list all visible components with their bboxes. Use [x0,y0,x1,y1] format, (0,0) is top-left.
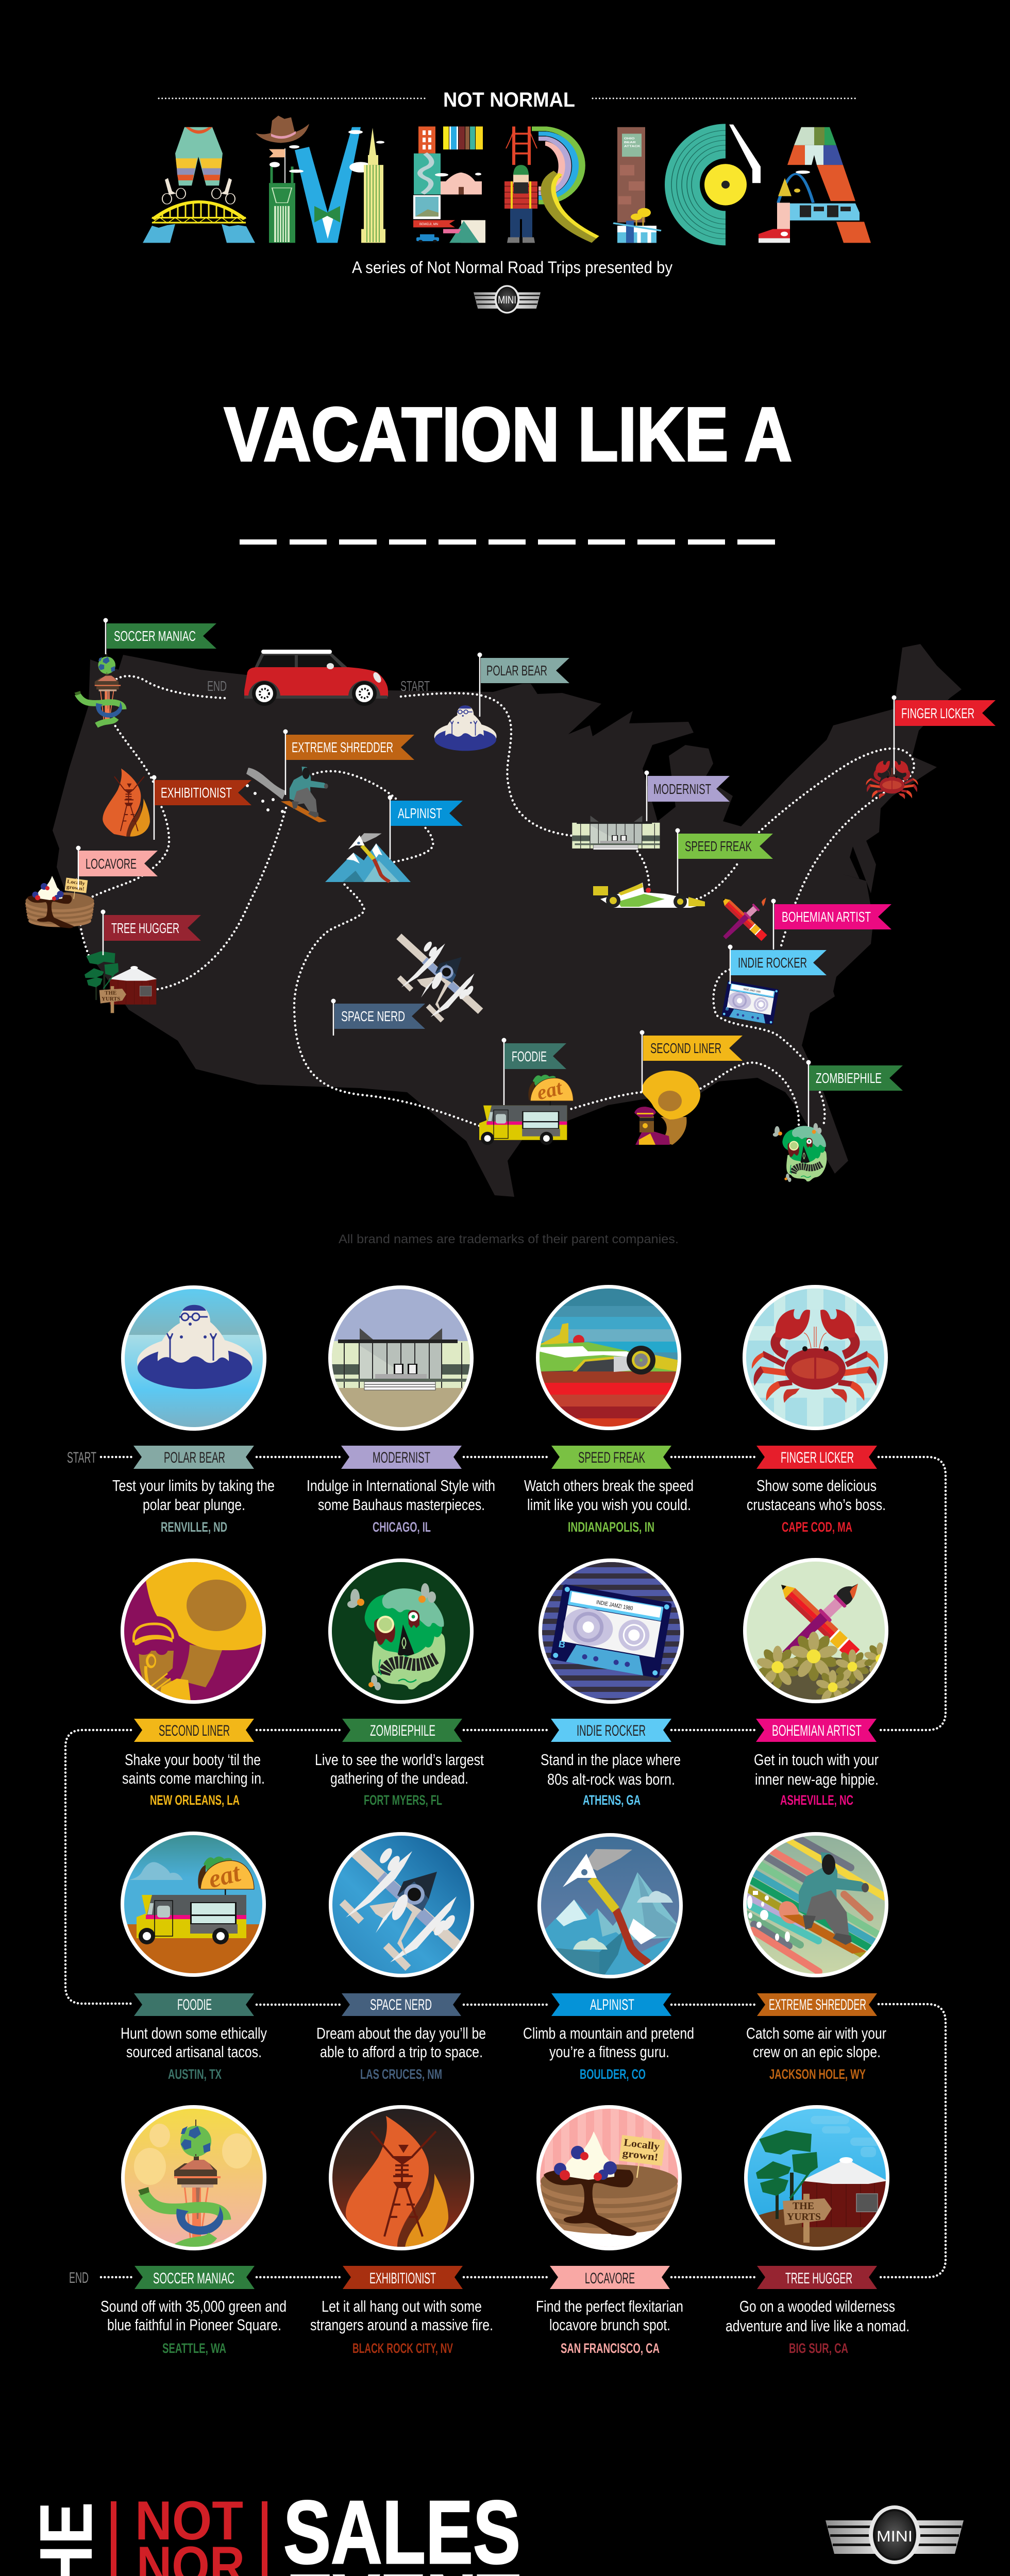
card: extreme shredder [743,1832,888,2082]
ribbon: speed freak: SPEED FREAK [578,1449,645,1466]
description: indie rocker [541,1751,681,1788]
description: indie rocker: 80s alt-rock was born. [547,1770,675,1788]
location: zombiephile: FORT MYERS, FL [364,1792,442,1808]
flag: space nerd: SPACE NERD [341,1008,405,1024]
flag: modernist: MODERNIST [653,781,711,797]
flag: soccer maniac: SOCCER MANIAC [114,628,196,644]
description: exhibitionist: strangers around a massive fire. [310,2316,493,2334]
flag: speed freak: SPEED FREAK [685,838,752,854]
letter E: buildings, books, road, alamo, postcard [413,126,485,243]
ribbon: finger licker [756,1446,877,1469]
icon: crab [866,760,918,799]
card: bohemian artist [743,1558,897,1808]
description: zombiephile: Live to see the world’s largest [315,1751,484,1769]
location: finger licker: CAPE COD, MA [782,1519,852,1535]
ribbon: zombiephile [342,1719,462,1742]
ribbon: soccer maniac: SOCCER MANIAC [153,2270,234,2287]
flag: zombiephile: ZOMBIEPHILE [816,1070,882,1086]
description: finger licker: Show some delicious [756,1477,877,1495]
card: space nerd [316,1832,486,2082]
flag: locavore [76,846,158,889]
medallion: speed freak [536,1285,681,1430]
description: speed freak: Watch others break the speed [524,1477,694,1495]
flag: soccer maniac [103,618,216,654]
medallion: spaceship [329,1832,474,1977]
flag: finger licker: FINGER LICKER [901,705,974,721]
icon: polar bear [434,705,497,751]
logo: mini large [826,2505,964,2564]
card: indie rocker [538,1558,684,1808]
heading: vacation like a: VACATION LIKE A [224,392,792,477]
logo: mini small [474,285,541,314]
icon: tuba player [634,1071,700,1145]
letter I: brick column, poster, house: ATTACK [624,145,641,148]
description: foodie: Hunt down some ethically [121,2024,267,2042]
description: finger licker [747,1477,886,1514]
flag: speed freak [675,828,773,893]
card: modernist [307,1285,495,1535]
flag: space nerd [331,998,425,1036]
letter C: vinyl record and tonearm [665,124,761,245]
card: polar bear [112,1285,275,1535]
description: modernist [307,1477,495,1514]
location: bohemian artist: ASHEVILLE, NC [780,1792,853,1808]
card: soccer maniac [100,2105,287,2356]
letter I: brick column, poster, house: BEAR [624,141,636,144]
red not normal stack [135,2489,246,2576]
medallion: zombie [328,1558,474,1704]
ribbon: second liner: SECOND LINER [159,1722,230,1739]
icon: modernist building [572,816,660,850]
ribbon: extreme shredder [757,1993,877,2016]
flag: extreme shredder: EXTREME SHREDDER [292,739,393,755]
flag: exhibitionist [152,775,251,840]
ribbon: modernist: MODERNIST [373,1449,430,1466]
flag: finger licker [891,696,996,774]
flag: indie rocker: INDIE ROCKER [738,955,807,971]
letter E: buildings, books, road, alamo, postcard: BEMIDJI, MN [419,222,438,226]
ribbon: foodie: FOODIE [177,1996,212,2013]
card: tree hugger [724,2105,920,2356]
description: bohemian artist: inner new-age hippie. [755,1770,879,1788]
ribbon: finger licker: FINGER LICKER [781,1449,854,1466]
description: modernist: some Bauhaus masterpieces. [318,1496,485,1514]
icon: spaceship plane [399,937,480,1021]
description: locavore: locavore brunch spot. [549,2316,670,2334]
ribbon: alpinist: ALPINIST [590,1996,634,2013]
ribbon: space nerd [342,1993,461,2016]
description: finger licker: crustaceans who’s boss. [747,1496,886,1514]
location: speed freak: INDIANAPOLIS, IN [568,1519,654,1535]
medallion: polar bear [121,1285,266,1431]
description: extreme shredder [746,2024,886,2061]
description: alpinist: Climb a mountain and pretend [523,2024,694,2042]
trademark note: All brand names are trademarks of their parent companies. [339,1232,679,1246]
ribbon: indie rocker: INDIE ROCKER [577,1722,646,1739]
flag: exhibitionist: EXHIBITIONIST [161,785,232,801]
ribbon: bohemian artist [756,1719,877,1742]
medallion: seattle soccer [121,2105,266,2250]
logo: mini large: MINI [877,2528,913,2545]
connector: dotted trail through the list [65,1457,946,2277]
list end label: END [69,2269,89,2286]
card: locavore [536,2105,683,2356]
description: extreme shredder: Catch some air with your [746,2024,886,2042]
icon: soccer seattle tower [75,653,124,725]
logo: mini small: MINI [498,294,516,306]
medallion: pancakes [536,2105,682,2250]
ribbon: space nerd: SPACE NERD [370,1996,432,2013]
flag: tree hugger: TREE HUGGER [111,920,179,936]
ribbon: extreme shredder: EXTREME SHREDDER [769,1996,866,2013]
icon: yurt and trees [85,951,157,1013]
ribbon: polar bear [133,1446,254,1469]
ribbon: exhibitionist [343,2266,463,2289]
subtitle: A series of Not Normal Road Trips presented by [352,258,672,277]
red not normal stack: NOT [135,2489,243,2551]
description: foodie: sourced artisanal tacos. [126,2043,262,2061]
medallion: modernist [328,1285,474,1434]
description: indie rocker: Stand in the place where [541,1751,681,1769]
location: indie rocker: ATHENS, GA [583,1792,641,1808]
end label: END [207,678,227,694]
medallion: tuba [121,1556,268,1704]
description: foodie [121,2024,267,2061]
description: locavore: Find the perfect flexitarian [536,2297,683,2315]
description: second liner: Shake your booty ‘til the [125,1751,261,1769]
description: polar bear [112,1477,275,1514]
description: alpinist: you’re a fitness guru. [549,2043,669,2061]
letter I: brick column, poster, house: OHIO [624,138,634,140]
ribbon: zombiephile: ZOMBIEPHILE [370,1722,435,1739]
description: alpinist [523,2024,694,2061]
icon: cassette [721,980,779,1025]
ribbon: second liner [134,1719,254,1742]
location: second liner: NEW ORLEANS, LA [150,1792,240,1808]
flag: alpinist [388,795,463,859]
icon: pencil and brush [719,894,769,941]
card: second liner [121,1556,268,1808]
red dividers [111,2501,267,2576]
flag: second liner: SECOND LINER [650,1040,721,1056]
location: soccer maniac: SEATTLE, WA [162,2341,226,2356]
description: tree hugger: adventure and live like a nomad. [726,2317,910,2335]
letter I: brick column, poster, house [613,127,661,243]
medallion: snowboarder [743,1832,888,1977]
description: space nerd [316,2024,486,2061]
footer: the not normal sales event [24,2482,520,2576]
header: not normal with dotted rules: NOT NORMAL [443,89,575,111]
letter A: sweater, cyclists, bridge [143,127,255,243]
description: bohemian artist: Get in touch with your [754,1751,879,1769]
letter R: bridge, rainbow, lumberjack, scarf [504,126,598,243]
icon: mountain and ice axe [325,833,411,882]
flag: bohemian artist [771,899,891,950]
medallion: pencil and brush [743,1558,897,1705]
letter M: tower, blue M, cowboy hat, bow tie, empire state [256,115,385,243]
location: extreme shredder: JACKSON HOLE, WY [769,2066,866,2082]
description: soccer maniac [100,2297,287,2334]
card: finger licker [743,1285,888,1535]
medallion: burning man [329,2105,474,2250]
location: tree hugger: BIG SUR, CA [789,2341,848,2356]
icon: snowboarder [246,767,328,822]
description: locavore [536,2297,683,2334]
location: polar bear: RENVILLE, ND [161,1519,227,1535]
description: zombiephile [315,1751,484,1787]
flag: foodie: FOODIE [512,1048,547,1064]
icon: burning man flame [103,769,150,837]
flag: extreme shredder [283,730,414,795]
ribbon: modernist [341,1446,462,1469]
card: exhibitionist [310,2105,493,2356]
flag: indie rocker [728,945,827,984]
ribbon: polar bear: POLAR BEAR [164,1449,225,1466]
ribbon: speed freak [551,1446,671,1469]
flag: bohemian artist: BOHEMIAN ARTIST [782,909,871,925]
ribbon: tree hugger: TREE HUGGER [785,2270,852,2287]
ribbon: bohemian artist: BOHEMIAN ARTIST [772,1722,862,1739]
ribbon: tree hugger [757,2266,877,2289]
icon: pancakes [25,876,94,928]
ribbon: indie rocker [551,1719,671,1742]
ribbon: alpinist [551,1993,671,2016]
description: exhibitionist: Let it all hang out with some [322,2297,482,2315]
description: second liner [122,1751,265,1787]
list start label: START [67,1449,96,1466]
description: polar bear: Test your limits by taking the [112,1477,275,1495]
icon: taco truck [479,1075,573,1145]
medallion: ice axe and mountains [533,1833,687,1983]
description: extreme shredder: crew on an epic slope. [753,2043,881,2061]
flag: alpinist: ALPINIST [398,805,442,821]
icon: red mini car [244,650,388,706]
flag: zombiephile [806,1060,903,1127]
ribbon: locavore [550,2266,670,2289]
start label: START [400,678,430,694]
description: speed freak [524,1477,694,1514]
description: tree hugger [726,2297,910,2335]
card: speed freak [524,1285,694,1535]
description: space nerd: Dream about the day you’ll be [316,2024,486,2042]
description: zombiephile: gathering of the undead. [330,1769,468,1787]
description: speed freak: limit like you wish you could. [527,1496,691,1514]
medallion: taco truck [121,1832,266,1981]
ribbon: soccer maniac [134,2266,255,2289]
description: second liner: saints come marching in. [122,1769,265,1787]
flag: tree hugger [101,910,201,955]
icon: zombie skull [773,1123,827,1182]
panel: us road trip map [25,618,996,1197]
location: space nerd: LAS CRUCES, NM [360,2066,442,2082]
description: soccer maniac: blue faithful in Pioneer Square. [107,2316,281,2334]
title art: america [143,115,871,245]
flag: polar bear [477,652,569,717]
flag: foodie [502,1038,566,1105]
blank word dashes [240,539,775,545]
medallion: crab [743,1285,888,1430]
card: zombiephile [315,1558,484,1808]
medallion: cassette [538,1558,684,1704]
icon: indy race car [593,883,705,908]
description: modernist: Indulge in International Style with [307,1477,495,1495]
ribbon: locavore: LOCAVORE [585,2270,635,2287]
location: foodie: AUSTIN, TX [168,2066,222,2082]
flag: modernist [644,771,730,821]
flag: polar bear: POLAR BEAR [486,663,547,679]
card: foodie [121,1832,267,2082]
location: locavore: SAN FRANCISCO, CA [561,2341,660,2356]
description: soccer maniac: Sound off with 35,000 green and [100,2297,287,2315]
route dots [80,676,914,1126]
letter A: patchwork, arch, train, sneaker [759,127,871,243]
medallion: yurt [724,2105,920,2283]
description: tree hugger: Go on a wooded wilderness [739,2297,895,2315]
description: polar bear: polar bear plunge. [143,1496,245,1514]
card: alpinist [523,1833,694,2082]
flag: locavore: LOCAVORE [86,856,137,872]
description: space nerd: able to afford a trip to space. [320,2043,483,2061]
ribbon: foodie [134,1993,254,2016]
location: alpinist: BOULDER, CO [580,2066,646,2082]
description: exhibitionist [310,2297,493,2334]
flag: second liner [640,1030,743,1092]
location: exhibitionist: BLACK ROCK CITY, NV [352,2341,453,2356]
map silhouette [53,644,962,1197]
description: bohemian artist [754,1751,879,1788]
location: modernist: CHICAGO, IL [373,1519,431,1535]
ribbon: exhibitionist: EXHIBITIONIST [369,2270,436,2287]
